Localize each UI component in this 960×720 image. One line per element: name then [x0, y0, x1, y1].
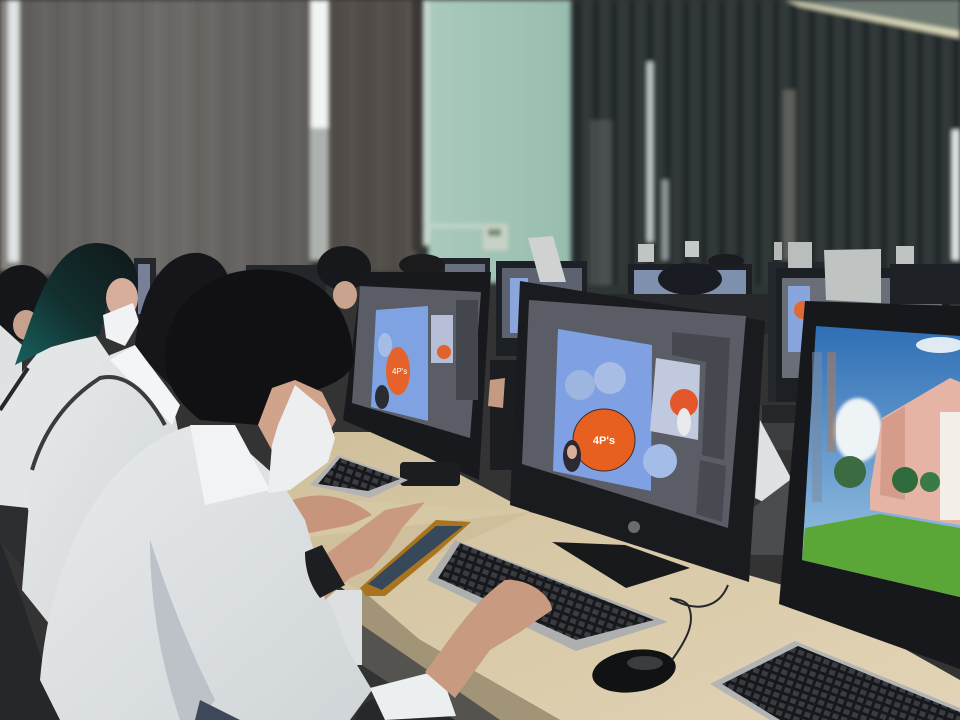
man in middle row	[22, 253, 229, 625]
desk surface	[262, 432, 960, 720]
logo	[628, 521, 640, 533]
other hand on the desk	[268, 495, 372, 535]
phone	[360, 520, 471, 596]
shirt	[40, 425, 372, 720]
shirt fold shadow	[150, 540, 215, 720]
bezel	[779, 301, 960, 669]
wristband	[305, 545, 345, 598]
sleeve	[370, 670, 456, 720]
presenter portrait	[563, 440, 581, 472]
background wall and curtains	[0, 0, 960, 300]
woman with teal hair	[0, 243, 139, 570]
hand on keyboard	[425, 580, 552, 698]
building	[870, 378, 960, 525]
bezel	[510, 281, 765, 582]
screen	[522, 300, 746, 528]
thumbnail poster	[650, 358, 700, 440]
face mask	[268, 385, 335, 493]
lawn	[802, 514, 960, 597]
monitor: centre with design software	[510, 281, 765, 588]
wallpaper sky	[802, 326, 960, 597]
face and ear	[258, 380, 336, 465]
far-left woman with mask	[0, 265, 55, 400]
keyboard: right	[710, 641, 960, 720]
distant monitors row	[134, 236, 960, 555]
desktop icons	[812, 352, 836, 502]
keyboard: centre	[427, 540, 668, 651]
clouds	[834, 398, 882, 462]
monitor: back with design software: 4P's	[392, 367, 407, 376]
trees	[892, 467, 918, 493]
monitor: centre with design software: 4P's	[593, 435, 615, 447]
mouse	[589, 585, 728, 698]
hand holding phone	[318, 502, 425, 600]
artboard	[553, 329, 652, 491]
foreground man	[40, 270, 552, 720]
monitor: back with design software	[343, 272, 491, 486]
hair	[165, 270, 353, 425]
shirt collar	[190, 425, 270, 505]
keyboard: back	[310, 455, 408, 498]
tool panels	[672, 332, 730, 460]
stand	[552, 542, 690, 588]
chair	[0, 540, 455, 720]
chair strap	[195, 700, 240, 720]
monitor: right with desktop wallpaper	[779, 301, 960, 669]
orange circle	[573, 409, 635, 471]
